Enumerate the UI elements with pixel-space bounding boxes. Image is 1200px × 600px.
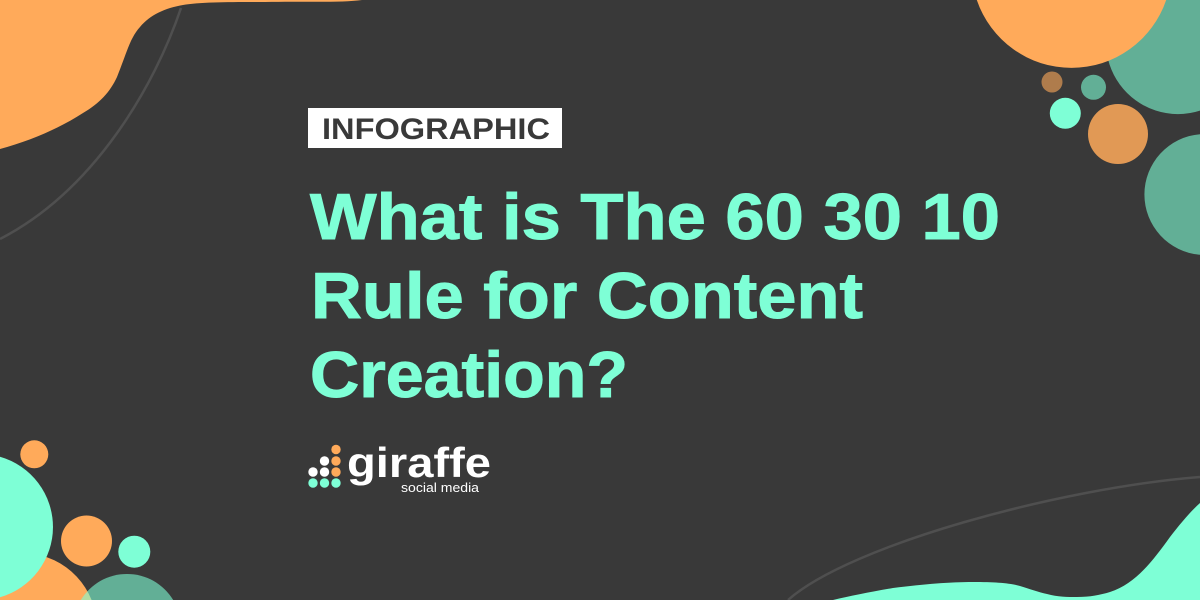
logo: giraffe social media: [308, 439, 491, 495]
circles: bottom-left cluster: [0, 440, 173, 600]
logo: giraffe social media: social media: [401, 481, 479, 495]
title: [310, 180, 1000, 411]
logo: giraffe social media: giraffe: [347, 439, 491, 486]
icon: logo dots: [308, 445, 341, 488]
blob: bottom-right mint: [833, 503, 1200, 600]
circles: top-right cluster: [977, 0, 1200, 255]
title: Rule for Content: [311, 259, 863, 332]
title: Creation?: [310, 338, 628, 411]
label: INFOGRAPHIC: INFOGRAPHIC: [322, 113, 550, 146]
blob: top-left orange: [0, 0, 362, 149]
label: INFOGRAPHIC: [308, 108, 562, 148]
title: What is The 60 30 10: [310, 180, 1000, 253]
